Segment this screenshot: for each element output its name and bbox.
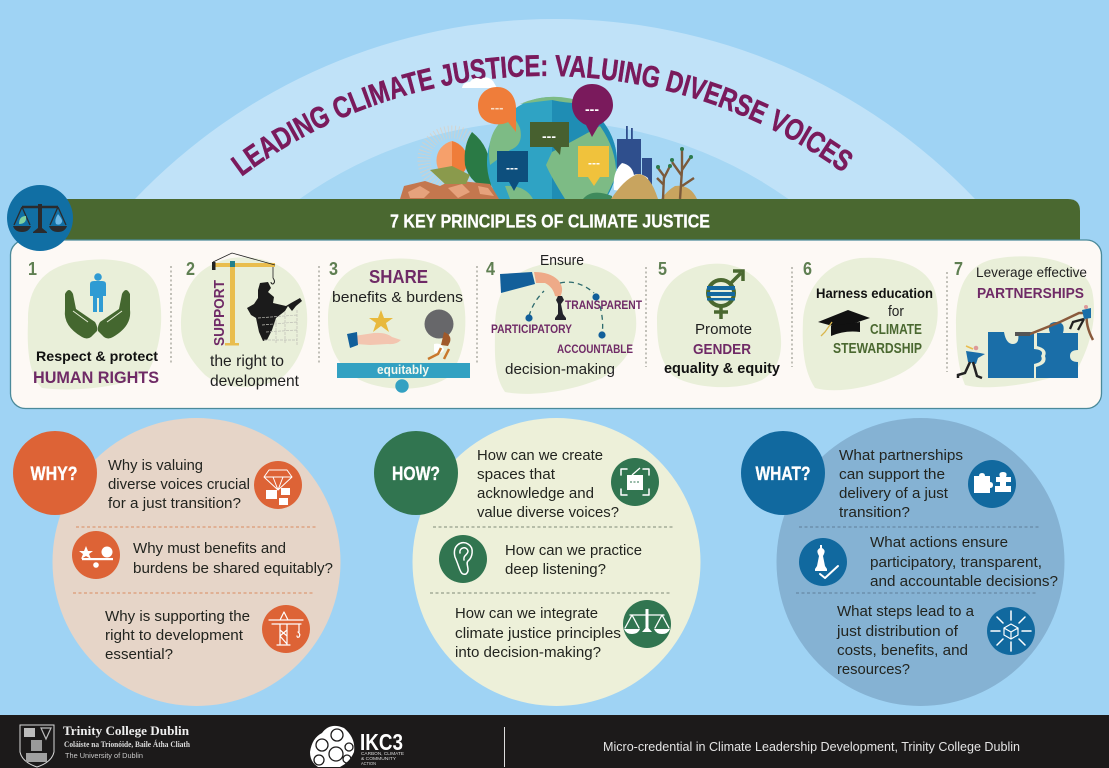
principle 1: human rights xyxy=(28,259,161,389)
icon: person pushing boulder xyxy=(424,310,454,359)
city xyxy=(617,126,652,185)
how question 3: climate justice principles xyxy=(455,625,621,642)
principle 6: climate stewardship: CLIMATE xyxy=(870,322,922,338)
panel: seven principles xyxy=(10,240,1102,408)
icon: puzzle pieces and people xyxy=(958,305,1093,378)
trinity wordmark: The University of Dublin xyxy=(65,751,143,760)
footer xyxy=(0,715,1109,768)
why question 1 xyxy=(108,457,250,512)
what question 3: What steps lead to a xyxy=(837,603,975,620)
what question 1: transition? xyxy=(839,504,910,521)
how question 1: How can we create xyxy=(477,447,603,464)
icon: box with arrows xyxy=(987,607,1035,655)
purple bubble xyxy=(572,84,613,137)
principles heading bar: 7 KEY PRINCIPLES OF CLIMATE JUSTICE xyxy=(390,210,710,232)
icon: scales xyxy=(623,600,671,648)
why badge: WHY? xyxy=(30,464,78,485)
trinity wordmark: Trinity College Dublin xyxy=(63,723,190,738)
ikc3 wordmark: & COMMUNITY xyxy=(361,756,396,761)
principle 6: climate stewardship: for xyxy=(888,303,904,320)
principle 5: gender equality: equality & equity xyxy=(664,361,780,377)
how question 1: value diverse voices? xyxy=(477,504,619,521)
why question 1: Why is valuing xyxy=(108,457,203,474)
icon: trinity crest xyxy=(20,725,54,767)
principle 1: human rights: 1 xyxy=(28,259,37,279)
principle 6: climate stewardship: STEWARDSHIP xyxy=(833,341,922,357)
what dividers xyxy=(796,527,1041,593)
why question 1: diverse voices crucial xyxy=(108,476,250,493)
principle 6: climate stewardship xyxy=(803,258,938,390)
icon: scales badge xyxy=(7,185,73,251)
principle 6: climate stewardship: Harness education xyxy=(816,285,933,301)
title: LEADING CLIMATE JUSTICE: VALUING DIVERSE VOICES xyxy=(230,55,852,176)
how question 3 xyxy=(455,605,621,661)
principle 1: human rights: HUMAN RIGHTS xyxy=(33,369,159,387)
principle 2: right to development xyxy=(181,253,307,390)
ikc3 wordmark: IKC3 xyxy=(360,729,403,755)
principle 7: partnerships xyxy=(954,256,1094,387)
panel: how xyxy=(374,418,700,706)
principle 5: gender equality xyxy=(657,259,781,387)
yellow bubble: --- xyxy=(588,156,600,170)
icon: star on hand xyxy=(347,310,401,348)
trinity wordmark: Coláiste na Tríonóide, Baile Átha Cliath xyxy=(64,739,191,749)
principle 3: share benefits and burdens: SHARE xyxy=(369,267,428,287)
why question 1: for a just transition? xyxy=(108,495,241,512)
why question 3: right to development xyxy=(105,627,244,644)
how question 3: How can we integrate xyxy=(455,605,598,622)
icon: crane outline xyxy=(262,605,310,653)
icon: person in hands xyxy=(65,273,130,338)
why question 3: Why is supporting the xyxy=(105,608,250,625)
what question 2: What actions ensure xyxy=(870,534,1008,551)
principle 5: gender equality: GENDER xyxy=(693,341,751,358)
illustration: globe with speech bubbles and landscapes xyxy=(400,77,697,199)
purple bubble: --- xyxy=(585,101,599,117)
hill xyxy=(611,174,658,199)
icon: india map xyxy=(247,282,302,345)
icon: mortarboard xyxy=(818,310,870,336)
principle 4: decision-making xyxy=(486,252,643,394)
what question 3 xyxy=(836,603,975,678)
trinity wordmark xyxy=(63,723,191,760)
ikc3 wordmark xyxy=(360,729,404,766)
how question 3: into decision-making? xyxy=(455,644,601,661)
principle 5: gender equality: 5 xyxy=(658,259,667,279)
why question 3: essential? xyxy=(105,646,173,663)
navy bubble: --- xyxy=(506,161,518,175)
how question 2 xyxy=(505,542,642,578)
principle 4: decision-making: PARTICIPATORY xyxy=(491,322,572,336)
why question 2: Why must benefits and xyxy=(133,540,286,557)
principle 5: gender equality: Promote xyxy=(695,321,752,338)
what badge: WHAT? xyxy=(756,464,810,485)
principle 4: decision-making: 4 xyxy=(486,259,495,279)
what circle background xyxy=(776,418,1064,706)
what question 3: costs, benefits, and xyxy=(837,642,968,659)
why badge xyxy=(13,431,97,515)
what badge xyxy=(741,431,825,515)
ikc3 wordmark: ACTION xyxy=(361,761,376,766)
icon: ikc3 logo xyxy=(310,726,354,767)
icon: gender symbol xyxy=(707,271,743,319)
why question 2 xyxy=(133,540,333,577)
principle 4: decision-making: ACCOUNTABLE xyxy=(557,342,633,356)
principle 2: right to development: SUPPORT xyxy=(211,280,228,346)
principle 2: right to development: the right to xyxy=(210,353,284,370)
how question 2: deep listening? xyxy=(505,561,606,578)
principle 3: share benefits and burdens xyxy=(328,259,470,393)
dotted dividers xyxy=(171,266,947,372)
principle 2: right to development: 2 xyxy=(186,259,195,279)
panel: what xyxy=(741,418,1064,706)
why circle background xyxy=(52,418,340,706)
principle 7: partnerships: Leverage effective xyxy=(976,264,1087,280)
principles heading bar xyxy=(40,199,1080,241)
principle 7: partnerships: PARTNERSHIPS xyxy=(977,285,1084,302)
sun xyxy=(424,132,480,188)
icon: crane xyxy=(212,253,275,346)
what question 3: resources? xyxy=(837,661,910,678)
icon: chess piece with tick xyxy=(799,538,847,586)
principle 3: share benefits and burdens: 3 xyxy=(329,259,338,279)
what question 1: can support the xyxy=(839,466,945,483)
yellow bubble xyxy=(578,146,609,186)
navy bubble xyxy=(497,151,528,191)
principle 4: decision-making: TRANSPARENT xyxy=(565,298,643,312)
ikc3 wordmark: CARBON, CLIMATE xyxy=(361,751,404,756)
background domes xyxy=(135,19,975,199)
why dividers xyxy=(73,527,318,593)
principle 7: partnerships: 7 xyxy=(954,259,963,279)
how badge xyxy=(374,431,458,515)
what question 1: delivery of a just xyxy=(839,485,949,502)
icon: diamond with speech boxes xyxy=(254,461,302,509)
how badge: HOW? xyxy=(392,464,440,485)
icon: ear xyxy=(439,535,487,583)
principle 1: human rights: Respect & protect xyxy=(36,348,158,364)
dark green bubble: --- xyxy=(542,128,556,144)
rocks xyxy=(400,180,499,199)
equitably banner xyxy=(337,363,470,393)
icon: speech box in frame xyxy=(611,458,659,506)
trees xyxy=(656,147,697,199)
credential text: Micro-credential in Climate Leadership Development, Trinity College Dublin xyxy=(603,740,1020,754)
principle 2: right to development: development xyxy=(210,373,300,390)
snowy cloud xyxy=(614,163,648,190)
cloud xyxy=(462,77,497,88)
equitably banner: equitably xyxy=(377,363,429,377)
how question 1: spaces that xyxy=(477,466,556,483)
how question 1 xyxy=(477,447,619,521)
icon: puzzle pieces xyxy=(968,460,1016,508)
what question 1 xyxy=(839,447,963,521)
dark green bubble xyxy=(530,122,569,155)
what question 2: and accountable decisions? xyxy=(870,573,1058,590)
what question 2 xyxy=(870,534,1058,590)
principle 4: decision-making: Ensure xyxy=(540,252,584,269)
principle 6: climate stewardship: 6 xyxy=(803,259,812,279)
what question 1: What partnerships xyxy=(839,447,963,464)
how question 1: acknowledge and xyxy=(477,485,594,502)
why question 2: burdens be shared equitably? xyxy=(133,560,333,577)
principle 4: decision-making: decision-making xyxy=(505,361,615,378)
what question 2: participatory, transparent, xyxy=(870,554,1042,571)
green mound xyxy=(430,166,470,184)
what question 3: just distribution of xyxy=(836,623,959,640)
orange bubble xyxy=(478,87,516,132)
panel: why xyxy=(13,418,340,706)
why question 3 xyxy=(105,608,250,663)
how dividers xyxy=(430,527,674,593)
orange bubble: --- xyxy=(490,100,504,115)
how question 2: How can we practice xyxy=(505,542,642,559)
icon: hand moving chess piece xyxy=(500,272,606,339)
icon: balance with star and ball xyxy=(72,531,120,579)
principle 3: share benefits and burdens: benefits & burdens xyxy=(332,289,463,306)
how circle background xyxy=(412,418,700,706)
globe xyxy=(487,97,617,199)
leaf xyxy=(465,132,492,190)
